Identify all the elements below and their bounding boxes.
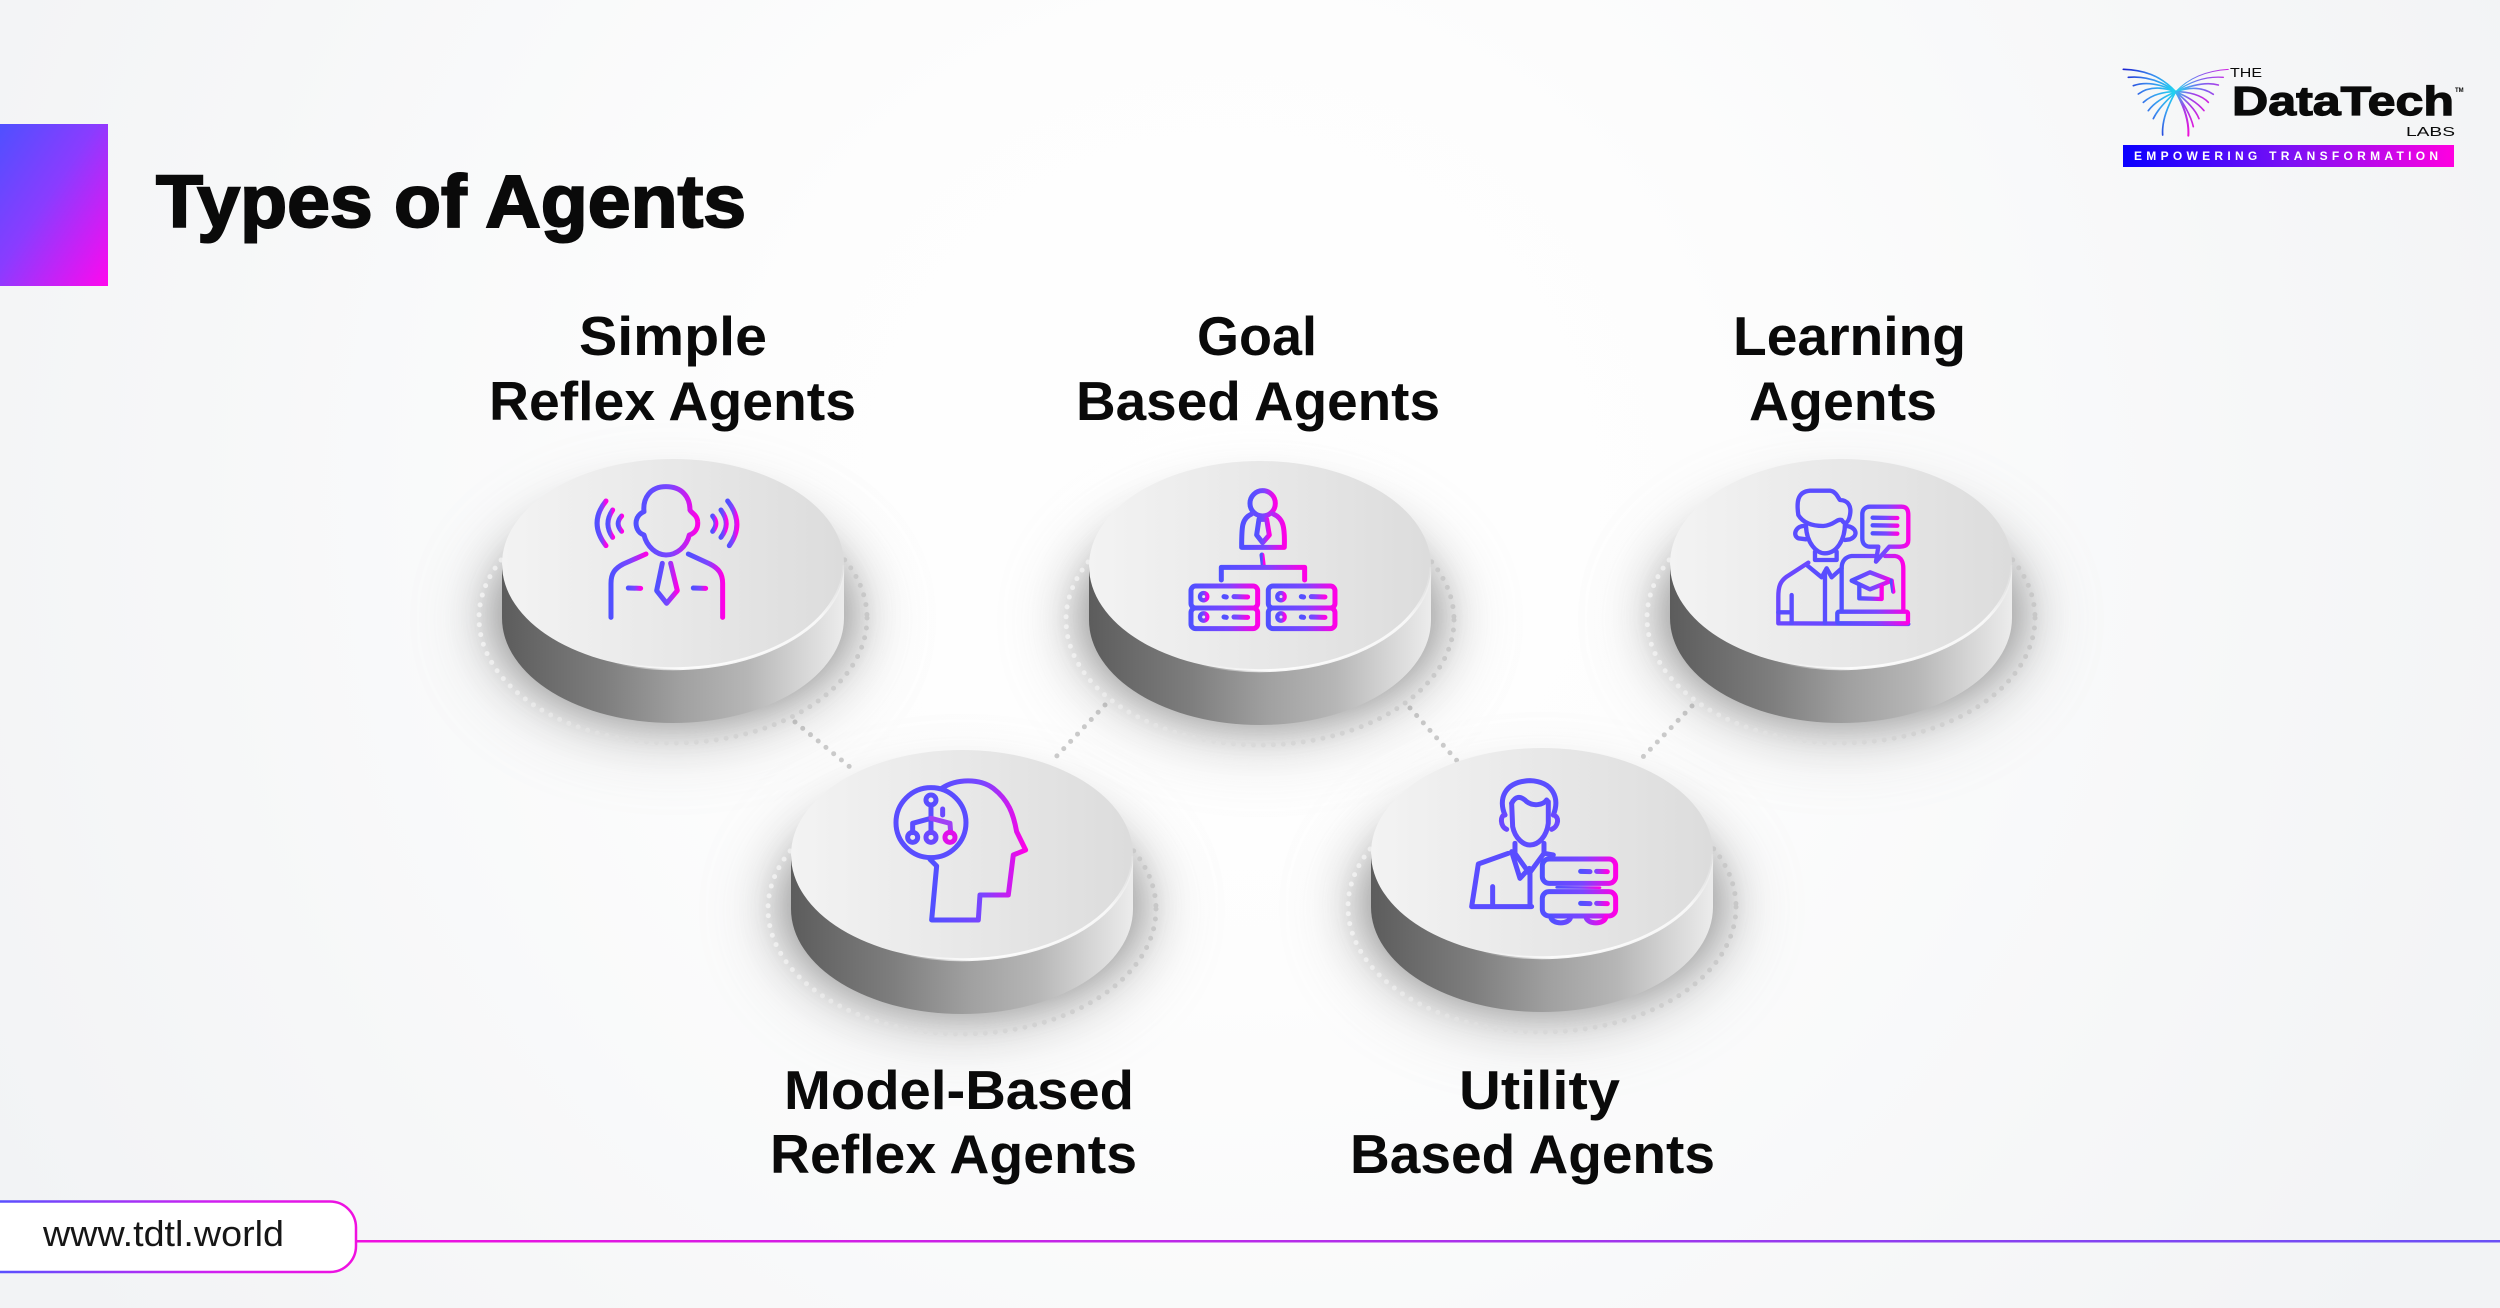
label: goal based agents — [1076, 305, 1440, 432]
label: model-based reflex agents — [770, 1059, 1137, 1185]
logo wings — [2123, 69, 2228, 136]
logo wordmark: THE — [2230, 66, 2262, 80]
label: utility based agents — [1350, 1059, 1715, 1185]
website pill: www.tdtl.world — [42, 1213, 284, 1254]
accent block — [0, 124, 108, 286]
label: utility based agents: Based Agents — [1350, 1123, 1715, 1185]
label: goal based agents: Goal — [1197, 305, 1317, 367]
disc: learning agents — [1645, 459, 2037, 745]
footer rule — [357, 1240, 2500, 1242]
label: model-based reflex agents: Reflex Agents — [770, 1123, 1137, 1185]
label: learning agents: Learning — [1733, 305, 1966, 367]
icon: person with sound waves — [597, 487, 737, 617]
title: Types of Agents — [156, 160, 746, 243]
disc: utility based agents — [1346, 748, 1738, 1034]
logo wordmark: LABS — [2406, 125, 2455, 139]
icon: teacher with laptop and speech bubble — [1778, 491, 1908, 624]
disc: goal based agents — [1064, 461, 1456, 747]
label: model-based reflex agents: Model-Based — [784, 1059, 1134, 1121]
icon: person with server stack — [1472, 781, 1616, 923]
label: goal based agents: Based Agents — [1076, 370, 1440, 432]
label: learning agents: Agents — [1749, 370, 1937, 432]
label: simple reflex agents — [489, 305, 856, 432]
label: learning agents — [1733, 305, 1966, 432]
disc: simple reflex agents — [477, 459, 869, 745]
logo wordmark — [2230, 66, 2464, 139]
logo wordmark: TM — [2455, 88, 2464, 94]
label: simple reflex agents: Simple — [579, 305, 767, 367]
logo wordmark: DataTech — [2232, 78, 2454, 124]
label: utility based agents: Utility — [1459, 1059, 1620, 1121]
logo tagline bar — [2123, 145, 2454, 167]
dotted connectors — [795, 705, 1692, 772]
logo — [2123, 66, 2464, 167]
icon: head with network — [896, 781, 1026, 920]
icon: person over servers — [1191, 491, 1335, 629]
label: simple reflex agents: Reflex Agents — [489, 370, 856, 432]
logo tagline bar: EMPOWERING TRANSFORMATION — [2134, 149, 2438, 163]
disc: model-based reflex agents — [766, 750, 1158, 1036]
website pill — [0, 1202, 356, 1272]
